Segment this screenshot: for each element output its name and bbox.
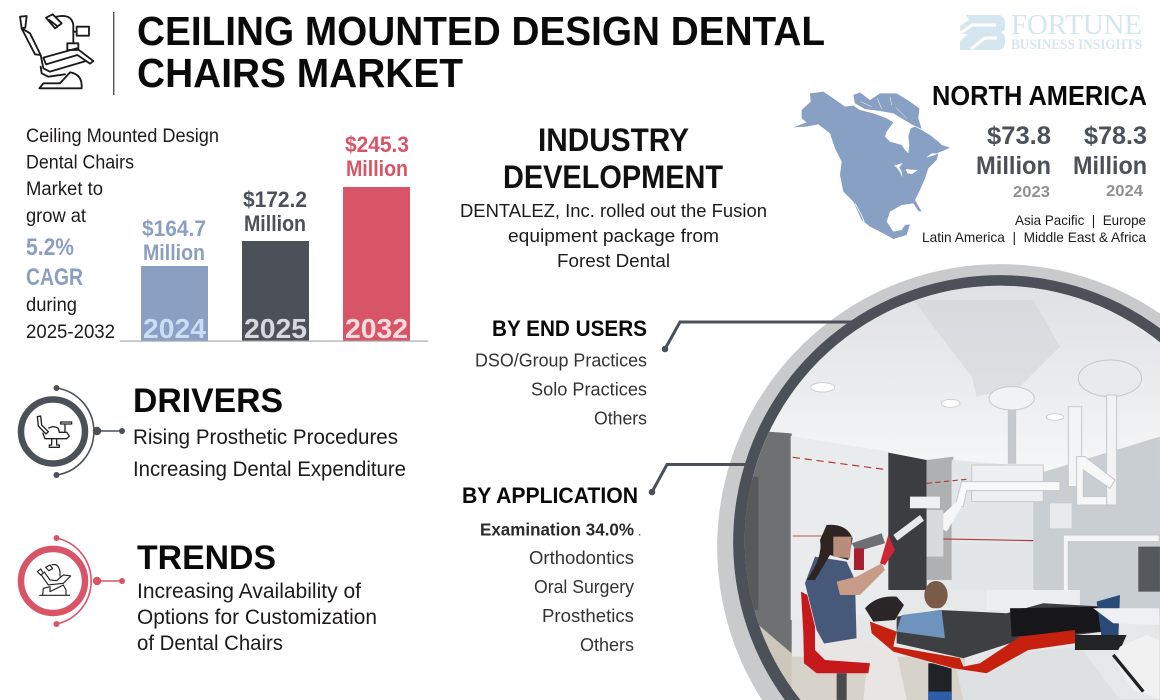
bar 2024: $164.7	[142, 216, 206, 241]
industry development: equipment package from	[508, 225, 719, 246]
floor	[759, 626, 800, 698]
clinic scene	[743, 280, 1160, 700]
child	[924, 581, 948, 609]
segment: by application: Others	[580, 635, 634, 655]
drivers text: Rising Prosthetic Procedures	[133, 426, 398, 449]
trends text: Options for Customization	[137, 606, 377, 629]
north america values	[922, 80, 1147, 245]
segment: by application: Prosthetics	[542, 606, 634, 626]
value 2024: $78.3	[1084, 122, 1147, 150]
bar 2032	[343, 132, 410, 344]
patient	[897, 603, 1103, 658]
value 2024	[1073, 122, 1147, 200]
instrument tray	[1093, 608, 1159, 625]
market growth text: Market to	[26, 178, 103, 200]
segment: by end users: Solo Practices	[531, 380, 647, 400]
stool	[801, 592, 870, 673]
counter	[1033, 590, 1080, 606]
segment: by application: BY APPLICATION	[462, 483, 638, 508]
logo: Fortune Business Insights	[960, 10, 1142, 53]
market growth text: grow at	[26, 205, 87, 227]
value 2024: Million	[1073, 152, 1147, 180]
title: CEILING MOUNTED DESIGN DENTAL	[137, 8, 825, 54]
scene base	[743, 280, 1160, 700]
icon: dental chair header	[20, 14, 93, 88]
industry development	[460, 122, 767, 271]
other regions: Latin America | Middle East & Africa	[922, 229, 1146, 245]
photo circle: dental clinic	[650, 264, 1160, 700]
microscope	[910, 497, 940, 508]
ceiling lights	[811, 383, 1064, 420]
industry development: Forest Dental	[557, 250, 670, 271]
right white wall	[952, 460, 1006, 580]
left dark wall	[744, 432, 792, 688]
bar 2032: Million	[346, 156, 408, 181]
ceiling lamps and arms	[955, 360, 1159, 597]
other regions: Asia Pacific | Europe	[1015, 212, 1146, 228]
bar 2024: 2024	[143, 313, 206, 344]
market growth text: 5.2%	[26, 234, 74, 261]
connector: end users	[663, 322, 860, 351]
segment: by application: Orthodontics	[529, 548, 634, 568]
value 2024: 2024	[1106, 183, 1143, 200]
logo: Fortune Business Insights: FORTUNE	[1011, 10, 1142, 41]
market growth text: 2025-2032	[26, 321, 115, 343]
drivers text: Increasing Dental Expenditure	[133, 458, 406, 481]
trends text	[137, 539, 377, 655]
dentist	[805, 557, 857, 648]
segment: by application	[462, 483, 641, 655]
connector: application	[650, 464, 745, 494]
industry development: DEVELOPMENT	[503, 159, 723, 195]
drivers text	[133, 382, 406, 481]
segment: by application: Oral Surgery	[534, 577, 634, 597]
market growth text: Dental Chairs	[26, 152, 134, 174]
dark column	[888, 453, 927, 590]
photo dark ring	[733, 275, 1160, 700]
market growth text: during	[26, 294, 77, 316]
drivers text: DRIVERS	[133, 382, 283, 420]
bar 2025: Million	[244, 211, 306, 236]
map: North America	[793, 92, 950, 239]
dental chair	[909, 656, 965, 700]
industry development: INDUSTRY	[538, 122, 689, 158]
segment: by end users: BY END USERS	[492, 316, 647, 341]
segment: by end users	[475, 316, 647, 428]
trends text: of Dental Chairs	[137, 632, 283, 655]
value 2023: 2023	[1013, 184, 1050, 201]
drivers icon	[21, 385, 125, 478]
value 2023: Million	[976, 152, 1051, 180]
trends text: TRENDS	[137, 539, 276, 577]
bar chart	[120, 132, 428, 344]
header divider	[113, 12, 114, 95]
value 2023	[976, 122, 1051, 201]
trends icon	[21, 535, 125, 627]
title: CHAIRS MARKET	[137, 50, 463, 96]
trends text: Increasing Availability of	[137, 580, 361, 603]
bar 2024: Million	[143, 240, 205, 265]
industry development: DENTALEZ, Inc. rolled out the Fusion	[460, 200, 767, 221]
bar 2024	[141, 216, 208, 344]
chart baseline	[120, 340, 428, 342]
bar 2025: $172.2	[243, 187, 307, 212]
market growth text: CAGR	[26, 264, 83, 291]
logo: Fortune Business Insights: BUSINESS INSIGHTS	[1011, 37, 1142, 53]
value 2023: $73.8	[987, 122, 1051, 150]
other regions	[922, 212, 1146, 245]
segment: by end users: DSO/Group Practices	[475, 351, 647, 371]
photo outer ring	[717, 264, 1160, 700]
segment: by application: Examination 34.0%	[480, 520, 634, 540]
ceiling	[743, 280, 1160, 480]
bar 2025: 2025	[244, 313, 307, 344]
market growth text: Ceiling Mounted Design	[26, 125, 219, 147]
bar 2025	[242, 187, 309, 344]
striped wall	[1033, 437, 1160, 617]
segment: by end users: Others	[594, 408, 647, 428]
title	[137, 8, 825, 96]
bar 2032: $245.3	[345, 132, 409, 157]
market growth text	[26, 125, 219, 343]
bar 2032: 2032	[345, 313, 408, 344]
white panel	[791, 436, 889, 620]
segment: by application: .	[638, 525, 641, 539]
